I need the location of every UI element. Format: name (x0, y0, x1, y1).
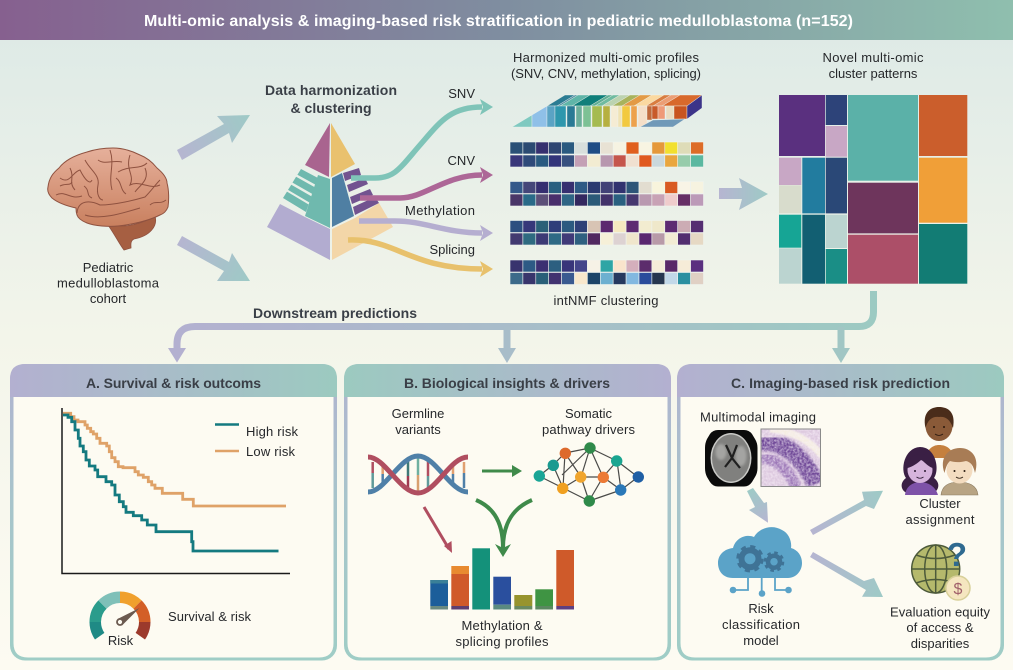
icon: risk gauge (89, 591, 151, 648)
flow: CNV (360, 153, 493, 198)
label: intNMF clustering: intNMF clustering (554, 293, 658, 308)
title banner: Multi-omic analysis & imaging-based risk stratification in pediatric medulloblastoma (n=152) (144, 13, 853, 30)
icon: cloud model (718, 527, 802, 597)
label: evaluation equity: Evaluation equity (890, 604, 990, 620)
connector: downstream arrows to panels (168, 291, 874, 363)
chart legend: High risk (246, 424, 298, 439)
label: methylation and splicing profiles (456, 618, 549, 649)
girl (902, 447, 938, 495)
chart legend (215, 424, 298, 459)
icon: group of children (902, 407, 978, 495)
text: cohort label: cohort (90, 291, 126, 306)
arrow: brain to harmonization (177, 115, 250, 160)
arrow: imaging to model (747, 488, 768, 523)
icon: globe with question and coin: $ (954, 581, 963, 598)
label: somatic pathway drivers: pathway drivers (542, 422, 636, 437)
panel B header (344, 364, 671, 397)
text: cohort label: Pediatric (83, 260, 134, 275)
label: evaluation equity: disparities (911, 636, 970, 651)
icon: risk gauge: Risk (108, 633, 134, 648)
heading: data harmonization: Data harmonization (265, 82, 397, 98)
label: survival and risk: Survival & risk (168, 609, 252, 624)
flow: SNV (351, 86, 493, 178)
heatmap: 3D data slab (512, 95, 702, 127)
label: somatic pathway drivers (542, 406, 636, 437)
label: methylation and splicing profiles: Methylation & (462, 618, 543, 633)
label: evaluation equity (890, 604, 990, 651)
heatmap: methylation matrix (510, 220, 704, 245)
flow: splicing (348, 240, 493, 277)
heading: novel cluster patterns (822, 50, 924, 81)
label: risk classification model: Risk (748, 601, 774, 616)
arrow: converging green (476, 500, 532, 557)
heading: harmonized profiles: (SNV, CNV, methylation, splicing) (511, 66, 701, 81)
label: germline variants: Germline (392, 406, 444, 421)
arrow: germline to somatic (482, 465, 522, 477)
heading: harmonized profiles: Harmonized multi-omic profiles (513, 50, 700, 65)
arrow: model to equity (810, 552, 883, 597)
bar chart: methylation and splicing (430, 548, 574, 610)
label: germline variants: variants (395, 422, 441, 437)
panel C header (677, 364, 1004, 397)
arrow: profiles to clusters (719, 178, 768, 210)
title banner (0, 0, 1013, 40)
heading: novel cluster patterns: cluster patterns (829, 66, 918, 81)
label: risk classification model (722, 601, 800, 648)
panel C header: C. Imaging-based risk prediction (731, 375, 950, 391)
light-haired child (941, 448, 978, 495)
treemap: cluster patterns (779, 95, 967, 284)
flow: splicing: Splicing (429, 242, 475, 257)
heading: data harmonization: & clustering (290, 100, 372, 116)
image: histology slide (760, 429, 822, 490)
panel A header: A. Survival & risk outcoms (86, 375, 261, 391)
heatmap: CNV matrix (510, 182, 704, 206)
label: methylation and splicing profiles: splicing profiles (456, 634, 549, 649)
flow: methylation (359, 203, 493, 241)
heading: downstream predictions: Downstream predictions (253, 305, 417, 321)
arrow: germline to profiles (424, 507, 452, 553)
heading: novel cluster patterns: Novel multi-omic (822, 50, 924, 65)
label: cluster assignment (906, 496, 975, 527)
label: risk classification model: classification (722, 617, 800, 632)
arrow: model to cluster assignment (810, 491, 883, 535)
heatmap: SNV matrix (510, 142, 704, 167)
panel C: imaging-based risk prediction (677, 364, 1004, 660)
dark-haired child (925, 407, 954, 458)
panel B header: B. Biological insights & drivers (404, 375, 610, 391)
heading: data harmonization (265, 82, 397, 116)
panel A header (10, 364, 337, 397)
label: cluster assignment: assignment (906, 512, 975, 527)
panel A: survival and risk outcomes (10, 364, 337, 660)
arrow: brain to downstream (177, 236, 250, 281)
label: somatic pathway drivers: Somatic (565, 406, 612, 421)
flow: CNV: CNV (448, 153, 475, 168)
icon: pyramid (267, 123, 393, 260)
text: cohort label: medulloblastoma (57, 276, 160, 290)
flow: methylation: Methylation (405, 203, 475, 218)
icon: pathway network (534, 442, 644, 507)
chart legend: Low risk (246, 444, 296, 459)
heatmap: splicing matrix (510, 260, 704, 284)
heading: harmonized profiles (511, 50, 701, 81)
icon: globe with question and coin (912, 536, 970, 600)
icon: globe with question and coin: ? (947, 536, 967, 573)
label: evaluation equity: of access & (906, 620, 974, 635)
label: cluster assignment: Cluster (919, 496, 961, 511)
label: germline variants (392, 406, 444, 437)
icon: brain (48, 148, 169, 250)
label: multimodal imaging: Multimodal imaging (700, 410, 816, 424)
flow: SNV: SNV (448, 86, 475, 101)
image: brain MRI (705, 430, 758, 486)
Kaplan-Meier chart (62, 408, 290, 574)
panel B: biological insights and drivers (344, 364, 671, 660)
text: cohort label (57, 260, 160, 306)
icon: DNA helix (368, 456, 468, 493)
label: risk classification model: model (743, 633, 779, 648)
